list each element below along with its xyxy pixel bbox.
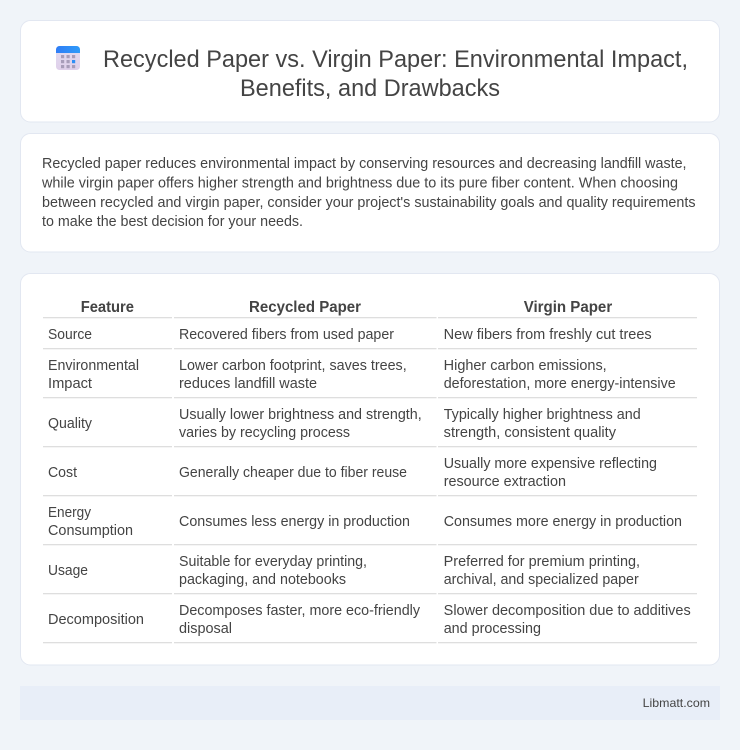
- row: quality: varies by recycling process: [179, 425, 350, 441]
- table header row: Feature: [81, 299, 134, 316]
- row: source: [48, 327, 652, 343]
- row: energy consumption: Consumption: [48, 523, 133, 539]
- row: usage: Suitable for everyday printing,: [179, 554, 367, 570]
- row: environmental impact: [48, 358, 676, 392]
- row: quality: strength, consistent quality: [444, 425, 617, 441]
- panel: comparison table: [20, 274, 720, 665]
- row: decomposition: Decomposition: [48, 612, 144, 628]
- title: [103, 46, 688, 102]
- row: quality: [48, 407, 641, 441]
- row: source: Source: [48, 327, 92, 343]
- panel: title header: [20, 20, 720, 122]
- row: decomposition: Slower decomposition due to additives: [444, 603, 691, 619]
- table header row: [81, 299, 612, 316]
- text block: summary paragraph: between recycled and virgin paper, consider your project's sustainability goals and quality requirements: [42, 195, 696, 211]
- row: cost: [48, 456, 657, 490]
- row: quality: Usually lower brightness and strength,: [179, 407, 422, 423]
- row: usage: Usage: [48, 563, 88, 579]
- row: energy consumption: Consumes less energy in production: [179, 514, 410, 530]
- text block: summary paragraph: while virgin paper offers higher strength and brightness due to its pure fiber content. When choosing: [41, 176, 678, 192]
- row: environmental impact: Impact: [48, 376, 92, 392]
- text block: summary paragraph: to make the best decision for your needs.: [42, 214, 303, 230]
- row: cost: resource extraction: [444, 474, 566, 490]
- row: source: Recovered fibers from used paper: [179, 327, 394, 343]
- row: decomposition: Decomposes faster, more eco-friendly: [179, 603, 421, 619]
- row: usage: packaging, and notebooks: [179, 572, 346, 588]
- title: Benefits, and Drawbacks: [240, 75, 500, 102]
- row: environmental impact: Lower carbon footprint, saves trees,: [179, 358, 407, 374]
- row: energy consumption: Energy: [48, 505, 92, 521]
- row: quality: Typically higher brightness and: [444, 407, 641, 423]
- row: decomposition: [48, 603, 691, 637]
- row: quality: Quality: [48, 416, 93, 432]
- title: Recycled Paper vs. Virgin Paper: Environmental Impact,: [103, 46, 688, 73]
- row: source: New fibers from freshly cut trees: [444, 327, 652, 343]
- row: energy consumption: Consumes more energy in production: [444, 514, 682, 530]
- row: environmental impact: Environmental: [48, 358, 139, 374]
- text block: summary paragraph: Recycled paper reduces environmental impact by conserving resources and decreasing landfill waste,: [42, 156, 686, 172]
- table header row: Recycled Paper: [249, 299, 361, 316]
- row: environmental impact: Higher carbon emissions,: [444, 358, 607, 374]
- row: usage: archival, and specialized paper: [444, 572, 639, 588]
- icon: calendar grid: [56, 46, 80, 70]
- row: usage: [48, 554, 640, 588]
- row: environmental impact: reduces landfill waste: [179, 376, 317, 392]
- row: cost: Usually more expensive reflecting: [444, 456, 657, 472]
- row: decomposition: and processing: [444, 621, 541, 637]
- footer credit: Libmatt.com: [643, 696, 710, 710]
- footer bar: [20, 686, 720, 720]
- row: energy consumption: [48, 505, 682, 539]
- table header row: Virgin Paper: [524, 299, 612, 316]
- text block: summary paragraph: [41, 156, 696, 230]
- row: cost: Generally cheaper due to fiber reuse: [179, 465, 407, 481]
- row: cost: Cost: [48, 465, 77, 481]
- panel: introduction text: [20, 134, 720, 252]
- row: decomposition: disposal: [179, 621, 232, 637]
- row: environmental impact: deforestation, more energy-intensive: [444, 376, 676, 392]
- row: usage: Preferred for premium printing,: [444, 554, 640, 570]
